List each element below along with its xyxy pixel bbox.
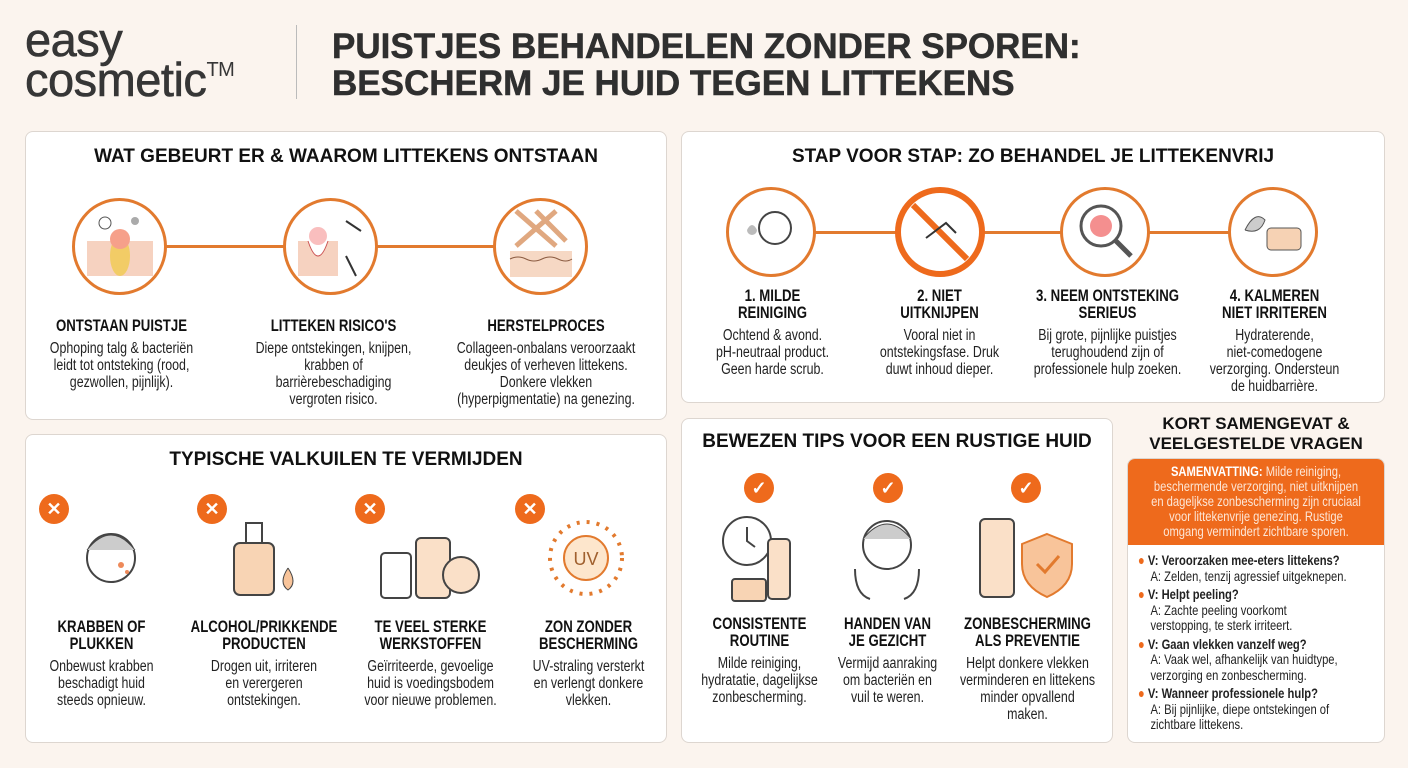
faq card [1127, 458, 1385, 743]
faq list: verzorging en zonbescherming. [1150, 666, 1307, 682]
summary box: en dageljkse zonbescherming zijn cruciaal [1151, 493, 1361, 509]
icon: x marks [39, 494, 545, 524]
icon: pimple [72, 198, 167, 295]
faq list: A: Zelden, tenzij agressief uitgeknepen. [1150, 568, 1347, 584]
heading: KORT SAMENGEVAT & [1162, 414, 1350, 433]
item: werkstoffen: huid is voedingsbodem [367, 675, 494, 692]
item: step 3: 3. NEEM ONTSTEKING [1036, 287, 1179, 305]
icon: routine [722, 516, 791, 602]
item: step 2: 2. NIET [917, 287, 962, 305]
logo [25, 13, 234, 106]
item: step 3: terughoudend zijn of [1051, 344, 1164, 361]
item: zon: vlekken. [566, 692, 611, 709]
icon: alcohol bottle [233, 522, 294, 596]
item: step 4: de huidbarrière. [1231, 378, 1318, 395]
item: krabben: Onbewust krabben [49, 658, 154, 675]
icon: checks: ✓ [880, 478, 896, 498]
item: zonbescherming: minder opvallend [980, 689, 1075, 706]
icon: hands face [854, 520, 920, 600]
item: step 1: 1. MILDE [745, 287, 800, 305]
item: alcohol: Drogen uit, irriteren [211, 658, 317, 675]
item: zonbescherming: ZONBESCHERMING [964, 615, 1091, 633]
faq list: ● V: Veroorzaken mee-eters littekens? [1138, 552, 1340, 568]
item: zon: UV-straling versterkt [533, 658, 644, 675]
icon: no squeeze [895, 187, 985, 277]
item: krabben: beschadigt huid [58, 675, 145, 692]
item: herstel: HERSTELPROCES [487, 317, 605, 335]
item: risico: LITTEKEN RISICO'S [271, 317, 396, 335]
item: risico: Diepe ontstekingen, knijpen, [256, 340, 411, 357]
item: zon: en verlengt donkere [534, 675, 643, 692]
icon: sunscreen shield [979, 518, 1073, 598]
item: alcohol: ALCOHOL/PRIKKENDE [191, 618, 337, 636]
item: zonbescherming: Helpt donkere vlekken [966, 655, 1089, 672]
heading [1149, 414, 1363, 453]
item: alcohol [191, 618, 337, 709]
item: zonbescherming: ALS PREVENTIE [975, 632, 1080, 650]
title: BESCHERM JE HUID TEGEN LITTEKENS [332, 64, 1015, 103]
icon: x marks: ✕ [362, 499, 378, 519]
icon: calming [1228, 187, 1318, 277]
heading: TYPISCHE VALKUILEN TE VERMIJDEN [169, 449, 523, 470]
item: step 1: Ochtend & avond. [723, 327, 822, 344]
summary box: voor littekenvrije genezing. Rustige [1169, 508, 1343, 524]
item: ontstaan: Ophoping talg & bacteriën [50, 340, 193, 357]
item: herstel [457, 317, 636, 408]
icon: uv sun [548, 520, 624, 596]
item: risico: krabben of [304, 357, 363, 374]
heading: WAT GEBEURT ER & WAAROM LITTEKENS ONTSTAAN [94, 146, 598, 167]
item: zon: ZON ZONDER [545, 618, 632, 636]
item: werkstoffen: WERKSTOFFEN [380, 635, 481, 653]
icon: checks: ✓ [1018, 478, 1034, 498]
faq list: zichtbare littekens. [1150, 716, 1243, 732]
heading: STAP VOOR STAP: ZO BEHANDEL JE LITTEKENVRIJ [792, 146, 1274, 167]
item: herstel: Collageen-onbalans veroorzaakt [457, 340, 635, 357]
icon: cleansing [726, 187, 816, 277]
item: alcohol: ontstekingen. [227, 692, 301, 709]
panel: pitfalls [25, 434, 667, 743]
icon: strong actives [380, 537, 480, 599]
item: handen: Vermijd aanraking [838, 655, 937, 672]
item: routine [701, 615, 818, 706]
item: step 2: UITKNIJPEN [900, 304, 979, 322]
summary box [1128, 459, 1384, 545]
item: risico: barrièrebeschadiging [276, 374, 391, 391]
item: step 3: SERIEUS [1079, 304, 1136, 322]
title: PUISTJES BEHANDELEN ZONDER SPOREN: [332, 27, 1081, 66]
icon: checks: ✓ [751, 478, 767, 498]
icon: x marks: ✕ [46, 499, 62, 519]
item: krabben: KRABBEN OF [58, 618, 146, 636]
item: herstel: (hyperpigmentatie) na genezing. [457, 391, 635, 408]
item: step 3: professionele hulp zoeken. [1034, 361, 1181, 378]
summary box: SAMENVATTING: Milde reiniging, [1171, 463, 1341, 479]
item: zonbescherming [960, 615, 1095, 723]
item: step 2: ontstekingsfase. Druk [880, 344, 999, 361]
item: werkstoffen: voor nieuwe problemen. [364, 692, 497, 709]
item: step 4: NIET IRRITEREN [1222, 304, 1327, 322]
item: step 4: 4. KALMEREN [1230, 287, 1319, 305]
icon: healing [493, 198, 588, 295]
item: ontstaan [50, 317, 193, 391]
item: step 2: Vooral niet in [904, 327, 975, 344]
faq list: A: Zachte peeling voorkomt [1150, 602, 1287, 618]
item: step 1: Geen harde scrub. [721, 361, 824, 378]
item: krabben: steeds opnieuw. [57, 692, 146, 709]
item: routine: CONSISTENTE [713, 615, 806, 633]
summary box: beschermende verzorging, niet uitknijpen [1154, 478, 1358, 494]
panel: steps [681, 131, 1385, 403]
item: ontstaan: gezwollen, pijnlijk). [70, 374, 173, 391]
item: alcohol: en verergeren [225, 675, 303, 692]
item: zonbescherming: verminderen en littekens [960, 672, 1095, 689]
item: handen [838, 615, 937, 706]
item: step 4: Hydraterende, [1235, 327, 1314, 344]
icon: scar risk [283, 198, 378, 295]
item: herstel: deukjes of verheven littekens. [464, 357, 628, 374]
title [332, 27, 1081, 103]
icon: checks [744, 473, 1041, 503]
icon: x marks: ✕ [522, 499, 538, 519]
item: routine: Milde reiniging, [718, 655, 801, 672]
icon: magnifier [1060, 187, 1150, 277]
item: ontstaan: ONTSTAAN PUISTJE [56, 317, 187, 335]
item: step 1 [716, 287, 829, 378]
item: zonbescherming: maken. [1007, 706, 1048, 723]
heading: BEWEZEN TIPS VOOR EEN RUSTIGE HUID [702, 431, 1092, 452]
item: alcohol: PRODUCTEN [222, 635, 306, 653]
item: step 4: verzorging. Ondersteun [1210, 361, 1339, 378]
logo: cosmeticTM [25, 53, 234, 106]
item: werkstoffen: Geïrriteerde, gevoelige [367, 658, 494, 675]
panel: summary & faq [1127, 414, 1385, 743]
faq list: verstopping, te sterk irriteert. [1150, 617, 1292, 633]
item: step 3: Bij grote, pijnlijke puistjes [1038, 327, 1177, 344]
faq list: ● V: Gaan vlekken vanzelf weg? [1138, 636, 1307, 652]
item: zon [533, 618, 644, 709]
item: risico [256, 317, 411, 408]
faq list: A: Vaak wel, afhankelijk van huidtype, [1150, 651, 1338, 667]
item: step 1: pH-neutraal product. [716, 344, 829, 361]
item: herstel: Donkere vlekken [500, 374, 592, 391]
icon: uv sun: UV [573, 549, 599, 569]
logo: easy [25, 13, 122, 66]
faq list [1138, 552, 1347, 732]
item: handen: om bacteriën en [843, 672, 932, 689]
item: zon: BESCHERMING [539, 635, 638, 653]
item: werkstoffen [364, 618, 497, 709]
icon: face picking [86, 533, 136, 583]
icon: x marks: ✕ [204, 499, 220, 519]
item: step 4 [1210, 287, 1339, 395]
item: handen: JE GEZICHT [849, 632, 926, 650]
faq list: A: Bij pijnlijke, diepe ontstekingen of [1150, 700, 1329, 716]
heading: VEELGESTELDE VRAGEN [1149, 434, 1363, 453]
item: werkstoffen: TE VEEL STERKE [374, 618, 486, 636]
panel: tips [681, 418, 1113, 743]
item: step 3 [1034, 287, 1181, 378]
item: routine: zonbescherming. [712, 689, 807, 706]
item: handen: vuil te weren. [851, 689, 924, 706]
item: risico: vergroten risico. [289, 391, 378, 408]
item: step 1: REINIGING [738, 304, 807, 322]
item: step 2 [880, 287, 999, 378]
item: krabben: PLUKKEN [70, 635, 133, 653]
summary box: omgang vermindert zichtbare sporen. [1163, 523, 1349, 539]
item: routine: hydratatie, dagelijkse [701, 672, 818, 689]
item: step 4: niet-comedogene [1227, 344, 1322, 361]
item: step 2: duwt inhoud dieper. [886, 361, 993, 378]
faq list: ● V: Helpt peeling? [1138, 586, 1239, 602]
panel: causes [25, 131, 667, 420]
faq list: ● V: Wanneer professionele hulp? [1138, 685, 1318, 701]
item: ontstaan: leidt tot ontsteking (rood, [54, 357, 189, 374]
item: routine: ROUTINE [730, 632, 789, 650]
item: krabben [49, 618, 154, 709]
item: handen: HANDEN VAN [844, 615, 931, 633]
